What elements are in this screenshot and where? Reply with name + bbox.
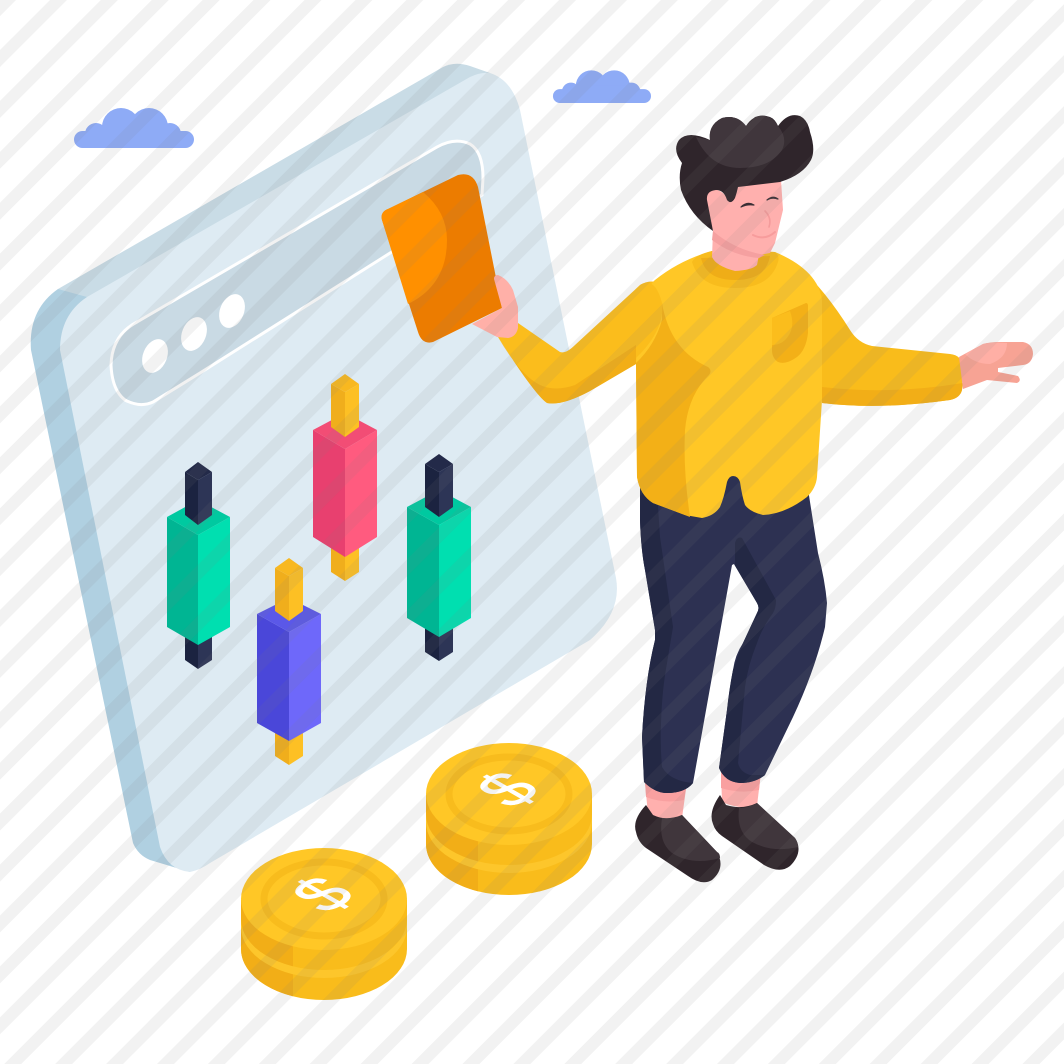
left sleeve xyxy=(498,281,680,404)
left hand xyxy=(472,275,518,338)
pants shading right leg xyxy=(719,538,776,783)
socks right xyxy=(721,772,761,807)
candlestick: green right xyxy=(407,454,471,661)
socks left xyxy=(645,782,687,819)
eyes xyxy=(741,197,778,207)
right sleeve xyxy=(800,268,963,406)
coin side xyxy=(426,795,592,895)
right hand xyxy=(959,342,1033,389)
window dots xyxy=(137,290,250,377)
shoe left xyxy=(635,805,721,882)
pants shading left leg xyxy=(640,470,693,793)
coin stack: front xyxy=(241,848,407,1000)
candlestick: pink xyxy=(313,374,377,581)
mouth xyxy=(753,232,775,237)
candlestick: blue xyxy=(257,558,321,765)
neck and face xyxy=(706,180,783,271)
pants xyxy=(640,470,827,793)
dollar sign: $ xyxy=(274,866,370,922)
cloud right xyxy=(553,70,651,103)
panel left edge xyxy=(31,289,190,872)
sweater side shading xyxy=(636,303,710,517)
hair highlight xyxy=(696,116,784,168)
person xyxy=(472,115,1033,882)
nose xyxy=(765,211,770,227)
shoe right xyxy=(712,795,799,870)
pocket xyxy=(772,303,808,363)
hair xyxy=(676,115,813,231)
coin side xyxy=(241,900,407,1000)
cloud left xyxy=(74,108,194,148)
coin top xyxy=(241,848,407,950)
collar xyxy=(692,251,779,288)
shoulder seam xyxy=(636,283,662,358)
address bar xyxy=(111,141,483,405)
panel front face xyxy=(60,73,617,872)
neck shadow xyxy=(712,231,765,258)
dollar sign: $ xyxy=(459,761,555,817)
coin top xyxy=(426,743,592,845)
sweater body xyxy=(636,251,822,518)
coin stack: back xyxy=(426,743,592,895)
candlestick: green left xyxy=(167,462,230,669)
orange card xyxy=(382,174,502,343)
panel top edge xyxy=(58,64,530,330)
panel: browser window with chart xyxy=(31,64,617,872)
